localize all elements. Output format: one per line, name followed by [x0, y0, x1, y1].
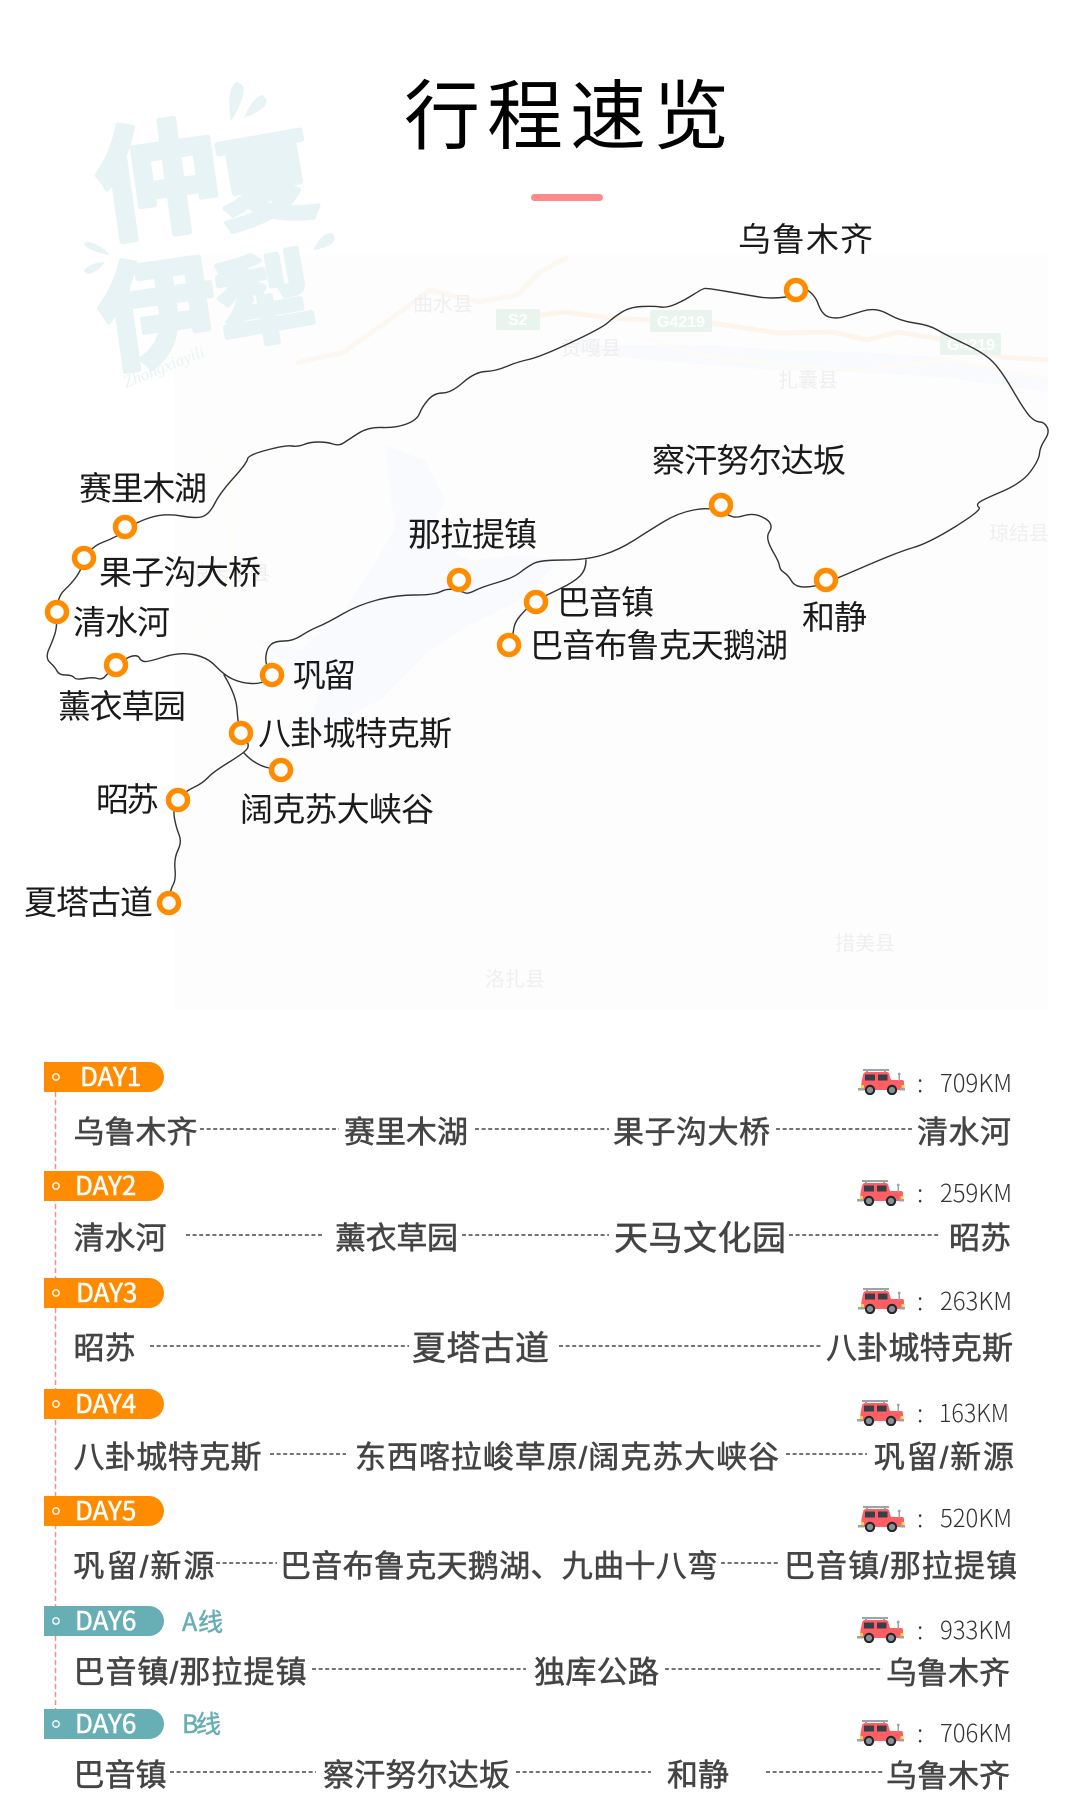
map label: 巴音布鲁克天鹅湖: 巴音布鲁克天鹅湖: [530, 627, 788, 664]
watermark logo: [83, 73, 335, 397]
faint base map: [175, 255, 1048, 1010]
faint county names: 琼结县: [989, 522, 1049, 545]
map label: 清水河: 清水河: [73, 604, 170, 641]
faint road sign: S2: [496, 309, 540, 330]
map label: 巴音镇: 巴音镇: [557, 584, 654, 621]
day 6 A route: 独库公路: [534, 1655, 659, 1690]
day 6 A route: 巴音镇/那拉提镇: [74, 1655, 306, 1690]
spur to 巴音镇: [512, 560, 586, 640]
day 5: [44, 1491, 1017, 1584]
day 4 distance: [857, 1394, 1009, 1430]
day 6 B distance: 706KM: [940, 1714, 1012, 1750]
spur to 八卦城 and 昭苏: [169, 675, 248, 903]
day 2: [44, 1166, 1012, 1258]
day 4 route: 东西喀拉峻草原/阔克苏大峡谷: [355, 1440, 779, 1475]
day 4 distance: :: [917, 1394, 923, 1430]
title underline: [531, 194, 603, 201]
timeline dashed line: [54, 1092, 56, 1709]
day 6 line B: [44, 1704, 1012, 1794]
map label: 阔克苏大峡谷: 阔克苏大峡谷: [240, 791, 434, 828]
day 1 badge: DAY1: [80, 1057, 141, 1094]
map label: 巩留: 巩留: [293, 657, 356, 694]
route B tag: B线: [182, 1705, 221, 1741]
day 6 B route: 和静: [667, 1758, 729, 1793]
day 4 distance: 163KM: [939, 1394, 1009, 1430]
day 5 badge: DAY5: [75, 1491, 136, 1528]
day 3 distance: [858, 1282, 1012, 1318]
day 4: [44, 1384, 1014, 1475]
marker: 八卦城特克斯: [232, 724, 250, 742]
day 5 badge: [44, 1491, 164, 1528]
day 3 route: 夏塔古道: [412, 1330, 549, 1368]
route A tag: A线: [182, 1603, 223, 1639]
marker: 巴音镇: [526, 592, 546, 612]
faint road sign: G4219: [650, 310, 712, 332]
day 4 route: 八卦城特克斯: [74, 1440, 262, 1475]
day 2 route: 天马文化园: [614, 1220, 786, 1258]
day 6 B badge: [44, 1704, 164, 1741]
day 6 A distance: 933KM: [940, 1611, 1012, 1647]
day 2 badge: [44, 1166, 164, 1203]
map label: 昭苏: 昭苏: [96, 781, 159, 818]
marker: 昭苏: [168, 790, 188, 810]
title: 行程速览: [404, 75, 729, 160]
day 6 A distance: :: [917, 1611, 923, 1647]
marker: 薰衣草园: [106, 656, 126, 674]
day 1 route: [74, 1115, 1011, 1150]
day 5 route: 巴音布鲁克天鹅湖、九曲十八弯: [280, 1549, 718, 1584]
day 3 route: [74, 1330, 1013, 1368]
faint road sign: G4219 east: [940, 333, 1001, 355]
day 4 route: [74, 1440, 1014, 1475]
map label: 夏塔古道: 夏塔古道: [24, 884, 153, 921]
day 6 B badge: DAY6: [75, 1704, 136, 1741]
faint county names: 扎囊县: [778, 369, 838, 392]
day 6 B route: 察汗努尔达坂: [323, 1758, 510, 1793]
day 1 route: 果子沟大桥: [613, 1115, 770, 1150]
map label: 薰衣草园: 薰衣草园: [58, 688, 186, 725]
day 1 distance: 709KM: [940, 1064, 1012, 1100]
day 3: [44, 1273, 1013, 1368]
marker: 察汗努尔达坂: [712, 496, 730, 514]
day 2 route: 薰衣草园: [335, 1221, 458, 1256]
marker: 赛里木湖: [116, 518, 134, 536]
logo droplets: [84, 82, 335, 274]
day 1 distance: [858, 1064, 1012, 1100]
day 5 distance: 520KM: [940, 1499, 1012, 1535]
day 3 distance: 263KM: [940, 1282, 1012, 1318]
marker: 清水河: [48, 602, 66, 622]
day 6 B distance: [857, 1714, 1012, 1750]
marker: 和静: [816, 570, 836, 590]
day 6 A route: 乌鲁木齐: [886, 1656, 1010, 1691]
day 2 distance: :: [917, 1174, 923, 1210]
map label: 赛里木湖: 赛里木湖: [79, 470, 207, 507]
faint county names: 洛扎县: [485, 968, 545, 991]
marker: 巩留: [262, 666, 282, 684]
day 4 badge: DAY4: [75, 1384, 136, 1421]
marker: 乌鲁木齐: [786, 280, 806, 300]
marker: 果子沟大桥: [74, 548, 94, 568]
marker: 阔克苏大峡谷: [272, 760, 290, 780]
day 6 B route: [74, 1758, 1010, 1794]
faint road sign: G4219: G4219: [657, 314, 705, 331]
logo character 伊: 伊: [87, 212, 227, 397]
map label: 察汗努尔达坂: 察汗努尔达坂: [652, 442, 846, 479]
day 4 route: 巩留/新源: [874, 1440, 1014, 1475]
day 2 badge: DAY2: [75, 1166, 136, 1203]
day 3 route: 八卦城特克斯: [826, 1331, 1013, 1366]
day 6 B distance: :: [917, 1714, 923, 1750]
marker: 那拉提镇: [450, 570, 468, 590]
map label: 八卦城特克斯: 八卦城特克斯: [258, 715, 452, 752]
day 6 A distance: [857, 1611, 1012, 1647]
day 1 badge: [44, 1057, 164, 1094]
day 2 route: 清水河: [74, 1221, 166, 1256]
day 1 distance: :: [917, 1064, 923, 1100]
day 3 distance: :: [917, 1282, 923, 1318]
day 2 route: [74, 1220, 1011, 1258]
day 3 badge: DAY3: [76, 1273, 137, 1310]
faint road sign: G4219 east: G4219: [947, 337, 995, 354]
day 6 A route: [74, 1655, 1010, 1691]
day 5 route: 巴音镇/那拉提镇: [784, 1549, 1017, 1584]
map label: 和静: 和静: [802, 599, 867, 636]
logo character 仲: 仲: [83, 73, 231, 269]
logo character 犁: 犁: [205, 217, 323, 370]
day 6 A badge: DAY6: [75, 1601, 136, 1638]
day 1 route: 赛里木湖: [344, 1115, 468, 1150]
faint county names: 措美县: [835, 932, 895, 955]
day 5 distance: [858, 1499, 1012, 1535]
day 6 A badge: [44, 1601, 164, 1638]
day 1 route: 乌鲁木齐: [74, 1115, 198, 1150]
day 2 distance: [857, 1174, 1012, 1210]
day 2 route: 昭苏: [949, 1221, 1011, 1256]
spur to 阔克苏: [244, 753, 281, 770]
day 5 route: 巩留/新源: [74, 1549, 214, 1584]
route map lines: [47, 286, 1048, 903]
faint road sign: S2: S2: [508, 312, 528, 329]
marker: 夏塔古道: [160, 894, 178, 912]
main loop: [47, 286, 1048, 684]
faint county names: 曲水县: [413, 293, 473, 316]
faint county names: [190, 293, 1049, 991]
day 6 B route: 巴音镇: [74, 1758, 166, 1793]
day 1: [44, 1057, 1012, 1150]
day 2 distance: 259KM: [940, 1174, 1012, 1210]
day 3 badge: [44, 1273, 164, 1310]
day 6 line A: [44, 1601, 1012, 1691]
day 5 distance: :: [917, 1499, 923, 1535]
faint county names: 贡嘎县: [561, 338, 621, 360]
faint county names: 浪卡子县: [190, 562, 270, 585]
map label: 乌鲁木齐: 乌鲁木齐: [738, 221, 873, 258]
day 3 route: 昭苏: [74, 1331, 136, 1366]
day 5 route: [74, 1549, 1017, 1584]
day 4 badge: [44, 1384, 164, 1421]
marker: 巴音布鲁克天鹅湖: [500, 636, 518, 654]
logo pinyin: Zhongxiayili: [120, 342, 207, 392]
day 1 route: 清水河: [917, 1115, 1011, 1150]
map label: 那拉提镇: 那拉提镇: [408, 516, 537, 553]
map label: 果子沟大桥: 果子沟大桥: [99, 554, 261, 591]
day 6 B route: 乌鲁木齐: [886, 1759, 1010, 1794]
logo character 夏: 夏: [204, 96, 326, 253]
